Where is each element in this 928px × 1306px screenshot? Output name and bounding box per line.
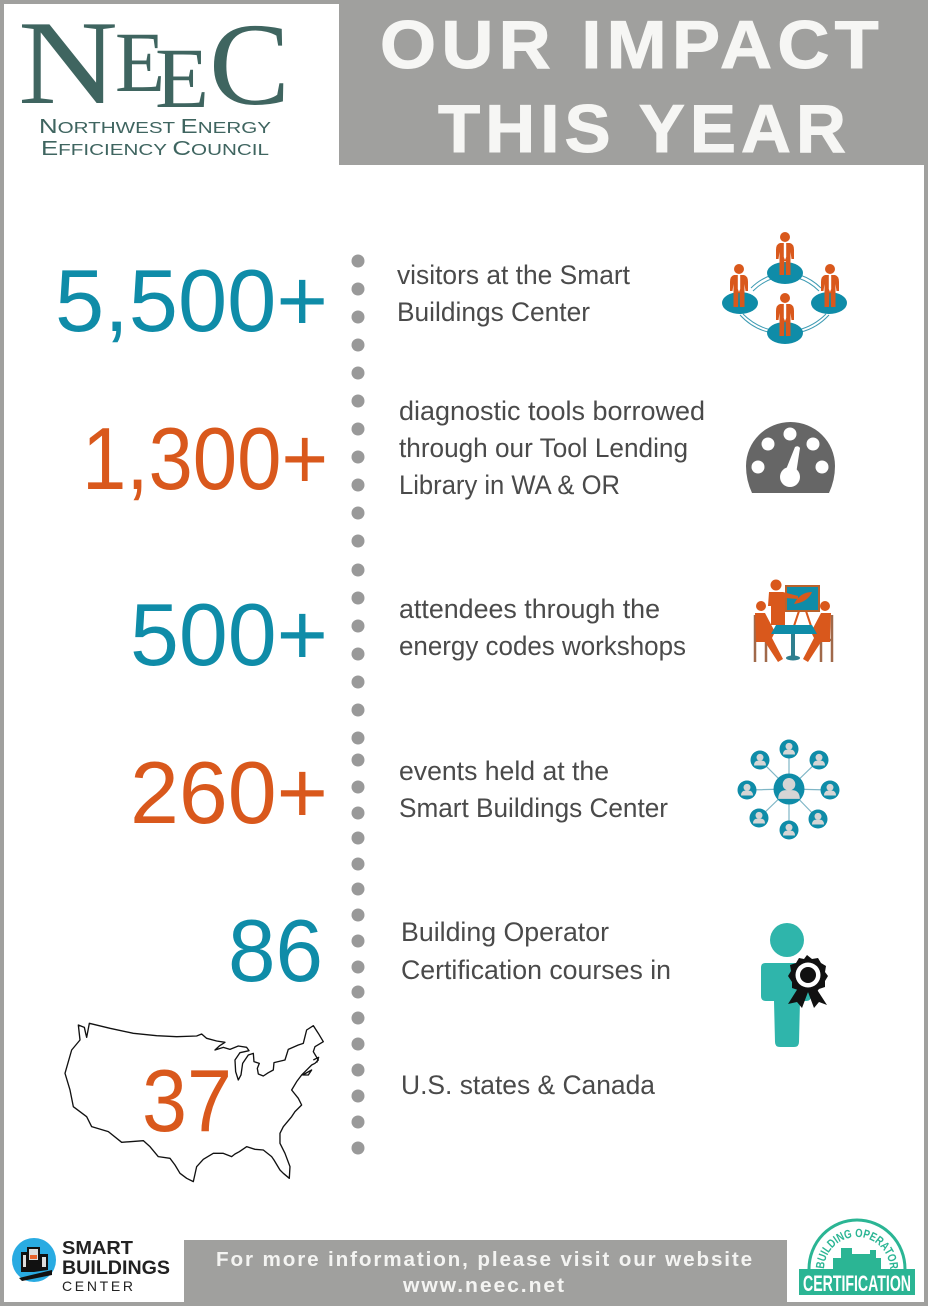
text: visitors: visitors at the Smart bbox=[397, 260, 630, 290]
title: OUR IMPACT bbox=[380, 7, 884, 83]
text: diagnostic tools: through our Tool Lending bbox=[399, 433, 688, 463]
panel: NEEC logo: E bbox=[155, 30, 209, 126]
panel: NEEC logo: C bbox=[209, 0, 290, 130]
text: events: events held at the bbox=[399, 756, 609, 786]
panel: Building Operator Certification logo bbox=[787, 1218, 924, 1302]
icon: gauge bbox=[746, 422, 835, 493]
panel: Building Operator Certification logo: BUILDING OPERATOR bbox=[816, 1228, 898, 1269]
text: diagnostic tools bbox=[399, 396, 705, 500]
panel: Smart Buildings Center logo bbox=[4, 1238, 184, 1302]
text: building operator certification: Certification courses in bbox=[401, 955, 671, 985]
footer text bbox=[216, 1249, 754, 1297]
text: building operator certification bbox=[401, 917, 671, 985]
panel: NEEC logo: E bbox=[115, 14, 165, 110]
stat: 37: 37 bbox=[142, 1051, 232, 1150]
panel: NEEC logo: N ORTHWEST ENERGY bbox=[39, 116, 271, 138]
stat: 500+: 500+ bbox=[130, 585, 328, 684]
title: THIS YEAR bbox=[438, 91, 851, 167]
text: attendees: attendees through the bbox=[399, 594, 660, 624]
icon: meeting bbox=[755, 580, 832, 662]
text: attendees bbox=[399, 594, 686, 661]
text: attendees: energy codes workshops bbox=[399, 631, 686, 661]
stat: 86: 86 bbox=[228, 901, 323, 1000]
text: diagnostic tools: diagnostic tools borrowed bbox=[399, 396, 705, 426]
text: events: Smart Buildings Center bbox=[399, 793, 668, 823]
stat: 260+: 260+ bbox=[130, 743, 328, 842]
footer text: For more information, please visit our website bbox=[216, 1249, 754, 1271]
stat: 5,500+: 5,500+ bbox=[55, 251, 328, 350]
icon: connected people bbox=[722, 232, 847, 344]
icon: certified person bbox=[761, 923, 828, 1047]
title bbox=[380, 7, 884, 167]
panel: Smart Buildings Center logo: BUILDINGS bbox=[62, 1258, 170, 1279]
text: building operator certification: Building Operator bbox=[401, 917, 609, 947]
text: events bbox=[399, 756, 668, 823]
panel: NEEC logo: EFFICIENCY C OUNCIL bbox=[41, 138, 269, 160]
text: visitors: Buildings Center bbox=[397, 297, 590, 327]
stat: 1,300+: 1,300+ bbox=[82, 409, 328, 508]
text: U.S. states and Canada: U.S. states & Canada bbox=[401, 1070, 656, 1100]
panel: Smart Buildings Center logo: SMART bbox=[62, 1238, 133, 1258]
panel: Smart Buildings Center logo: CENTER bbox=[62, 1278, 133, 1294]
map: United States outline bbox=[65, 1023, 323, 1182]
text: visitors bbox=[397, 260, 630, 327]
dotted divider bbox=[352, 254, 364, 1154]
icon: network hub bbox=[738, 740, 840, 840]
text: diagnostic tools: Library in WA & OR bbox=[399, 470, 620, 500]
panel: NEEC logo bbox=[4, 0, 339, 165]
footer text: www.neec.net bbox=[402, 1275, 566, 1297]
